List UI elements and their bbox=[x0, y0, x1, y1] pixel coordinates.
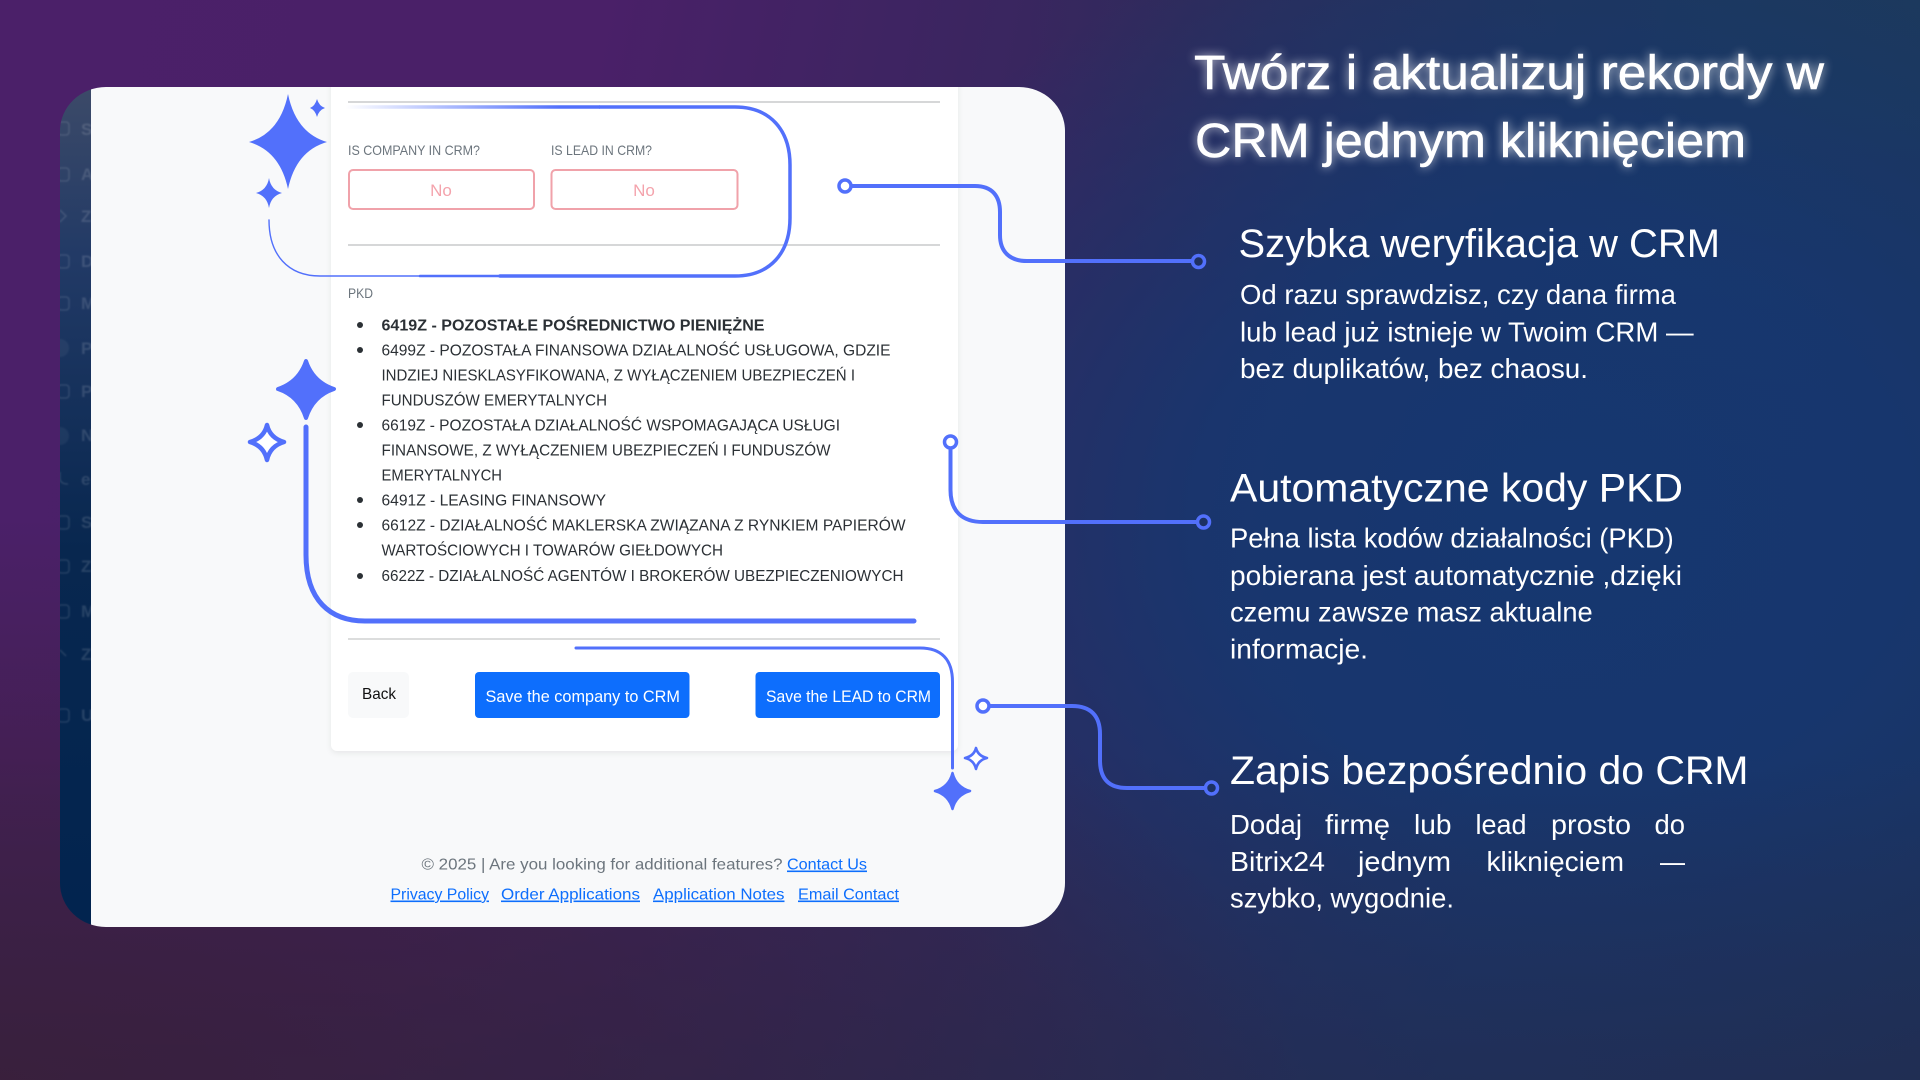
text block: save directly to CRM: lead bbox=[1476, 809, 1526, 840]
button: back: Back bbox=[362, 686, 397, 703]
text block: save directly to CRM: do bbox=[1654, 809, 1685, 840]
sidebar: dark blurred navigation: e bbox=[81, 470, 90, 489]
sidebar: dark blurred navigation: S bbox=[81, 513, 92, 532]
text block: automatic PKD codes bbox=[1230, 523, 1682, 665]
sidebar: dark blurred navigation: Z bbox=[81, 645, 91, 664]
list: PKD codes: 6491Z - LEASING FINANSOWY bbox=[382, 493, 606, 510]
heading: save directly to CRM: Zapis bezpośrednio do CRM bbox=[1230, 749, 1748, 793]
text block: save directly to CRM: kliknięciem bbox=[1486, 846, 1624, 877]
text block: save directly to CRM: jednym bbox=[1357, 846, 1451, 877]
button: lead No bbox=[552, 170, 738, 209]
sidebar: dark blurred navigation: P bbox=[81, 339, 92, 358]
list: PKD codes: 6619Z - POZOSTAŁA DZIAŁALNOŚĆ WSPOMAGAJĄCA USŁUGI bbox=[382, 417, 840, 435]
text block: quick CRM verification: lub lead już istnieje w Twoim CRM — bbox=[1240, 317, 1694, 348]
connector: CRM check bbox=[839, 180, 1204, 268]
sidebar: dark blurred navigation: D bbox=[81, 252, 93, 271]
footer: copyright and links bbox=[390, 856, 900, 904]
text block: automatic PKD codes: czemu zawsze masz aktualne bbox=[1230, 597, 1593, 628]
list: PKD codes: WARTOŚCIOWYCH I TOWARÓW GIEŁDOWYCH bbox=[382, 542, 723, 560]
list: PKD codes: FINANSOWE, Z WYŁĄCZENIEM UBEZPIECZEŃ I FUNDUSZÓW bbox=[382, 443, 831, 460]
text block: quick CRM verification bbox=[1240, 279, 1694, 384]
list: PKD codes: 6612Z - DZIAŁALNOŚĆ MAKLERSKA ZWIĄZANA Z RYNKIEM PAPIERÓW bbox=[382, 517, 906, 535]
button: save company: Save the company to CRM bbox=[486, 687, 680, 706]
icon: outline sparkle PKD bbox=[250, 425, 284, 460]
sidebar: dark blurred navigation: U bbox=[81, 706, 93, 725]
connector: save to CRM bbox=[977, 700, 1218, 794]
text block: save directly to CRM: prosto bbox=[1551, 809, 1631, 840]
card: company form bbox=[331, 70, 958, 751]
sidebar: dark blurred navigation: N bbox=[81, 426, 93, 445]
button: back bbox=[363, 688, 396, 699]
footer: copyright and links: Application Notes bbox=[653, 886, 784, 904]
list: PKD codes: FUNDUSZÓW EMERYTALNYCH bbox=[382, 393, 607, 410]
text block: save directly to CRM: — bbox=[1660, 846, 1685, 877]
text block: quick CRM verification: bez duplikatów, bez chaosu. bbox=[1240, 353, 1588, 384]
list: PKD codes: 6419Z - POZOSTAŁE POŚREDNICTWO PIENIĘŻNE bbox=[382, 317, 764, 335]
panel background bbox=[91, 87, 1065, 927]
footer: copyright and links: Contact Us bbox=[787, 856, 867, 874]
highlight: save buttons bracket bbox=[576, 648, 952, 768]
icon: small sparkle top bbox=[310, 99, 325, 117]
icon: filled sparkle save bbox=[935, 773, 970, 809]
button: lead No: No bbox=[633, 181, 655, 200]
icon: filled sparkle PKD bbox=[278, 361, 334, 418]
sidebar: dark blurred navigation: S bbox=[81, 120, 92, 139]
list: PKD codes: INDZIEJ NIESKLASYFIKOWANA, Z WYŁĄCZENIEM UBEZPIECZEŃ I bbox=[382, 368, 855, 385]
footer: copyright and links: Email Contact bbox=[798, 886, 900, 904]
sidebar: dark blurred navigation: M bbox=[81, 602, 95, 621]
button: save company bbox=[475, 672, 690, 718]
text block: save directly to CRM: szybko, wygodnie. bbox=[1230, 883, 1454, 914]
footer: copyright and links: © 2025 | Are you looking for additional features? bbox=[422, 856, 783, 874]
heading: automatic PKD codes: Automatyczne kody PKD bbox=[1230, 467, 1683, 511]
button: company No: No bbox=[430, 181, 452, 200]
label: is company in CRM: IS COMPANY IN CRM? bbox=[348, 142, 480, 158]
list: PKD codes: EMERYTALNYCH bbox=[382, 468, 502, 485]
footer: copyright and links: Privacy Policy bbox=[390, 886, 489, 904]
text block: automatic PKD codes: pobierana jest automatycznie ,dzięki bbox=[1230, 560, 1682, 591]
connector: PKD bbox=[944, 436, 1210, 528]
highlight: PKD list bracket bbox=[306, 427, 914, 621]
button: save lead: Save the LEAD to CRM bbox=[766, 687, 931, 706]
sidebar: dark blurred navigation: A bbox=[81, 165, 93, 184]
sidebar: dark blurred navigation: Z bbox=[81, 557, 91, 576]
text block: save directly to CRM: lub bbox=[1414, 809, 1452, 840]
icon: small sparkle bottom bbox=[256, 178, 282, 208]
panel: app screenshot bbox=[51, 70, 1065, 927]
heading: quick CRM verification: Szybka weryfikacja w CRM bbox=[1238, 222, 1720, 266]
sidebar: dark blurred navigation bbox=[60, 89, 92, 925]
sidebar: dark blurred navigation: Z bbox=[81, 207, 91, 226]
text block: save directly to CRM: Bitrix24 bbox=[1230, 846, 1325, 877]
label: PKD: PKD bbox=[348, 285, 373, 301]
title: CRM jednym kliknięciem bbox=[1195, 115, 1746, 168]
icon: large sparkle bbox=[249, 94, 327, 189]
label: is lead in CRM: IS LEAD IN CRM? bbox=[551, 142, 652, 158]
text block: save directly to CRM bbox=[1230, 809, 1685, 914]
icon: outline sparkle save bbox=[965, 748, 987, 769]
list: PKD codes: 6622Z - DZIAŁALNOŚĆ AGENTÓW I BROKERÓW UBEZPIECZENIOWYCH bbox=[382, 567, 904, 585]
sidebar: dark blurred navigation: P bbox=[81, 382, 92, 401]
sidebar: dark blurred navigation: M bbox=[81, 294, 95, 313]
button: company No bbox=[349, 170, 534, 209]
footer: copyright and links: Order Applications bbox=[501, 886, 640, 904]
highlight: CRM check outline bbox=[269, 107, 790, 276]
text block: automatic PKD codes: Pełna lista kodów działalności (PKD) bbox=[1230, 523, 1674, 554]
list: PKD codes bbox=[357, 317, 906, 585]
list: PKD codes: 6499Z - POZOSTAŁA FINANSOWA DZIAŁALNOŚĆ USŁUGOWA, GDZIE bbox=[382, 342, 890, 360]
button: save lead bbox=[756, 672, 940, 718]
text block: quick CRM verification: Od razu sprawdzisz, czy dana firma bbox=[1240, 279, 1676, 310]
title bbox=[1194, 47, 1824, 168]
title: Twórz i aktualizuj rekordy w bbox=[1194, 47, 1824, 100]
text block: automatic PKD codes: informacje. bbox=[1230, 634, 1368, 665]
text block: save directly to CRM: Dodaj bbox=[1230, 809, 1302, 840]
text block: save directly to CRM: firmę bbox=[1325, 809, 1390, 840]
